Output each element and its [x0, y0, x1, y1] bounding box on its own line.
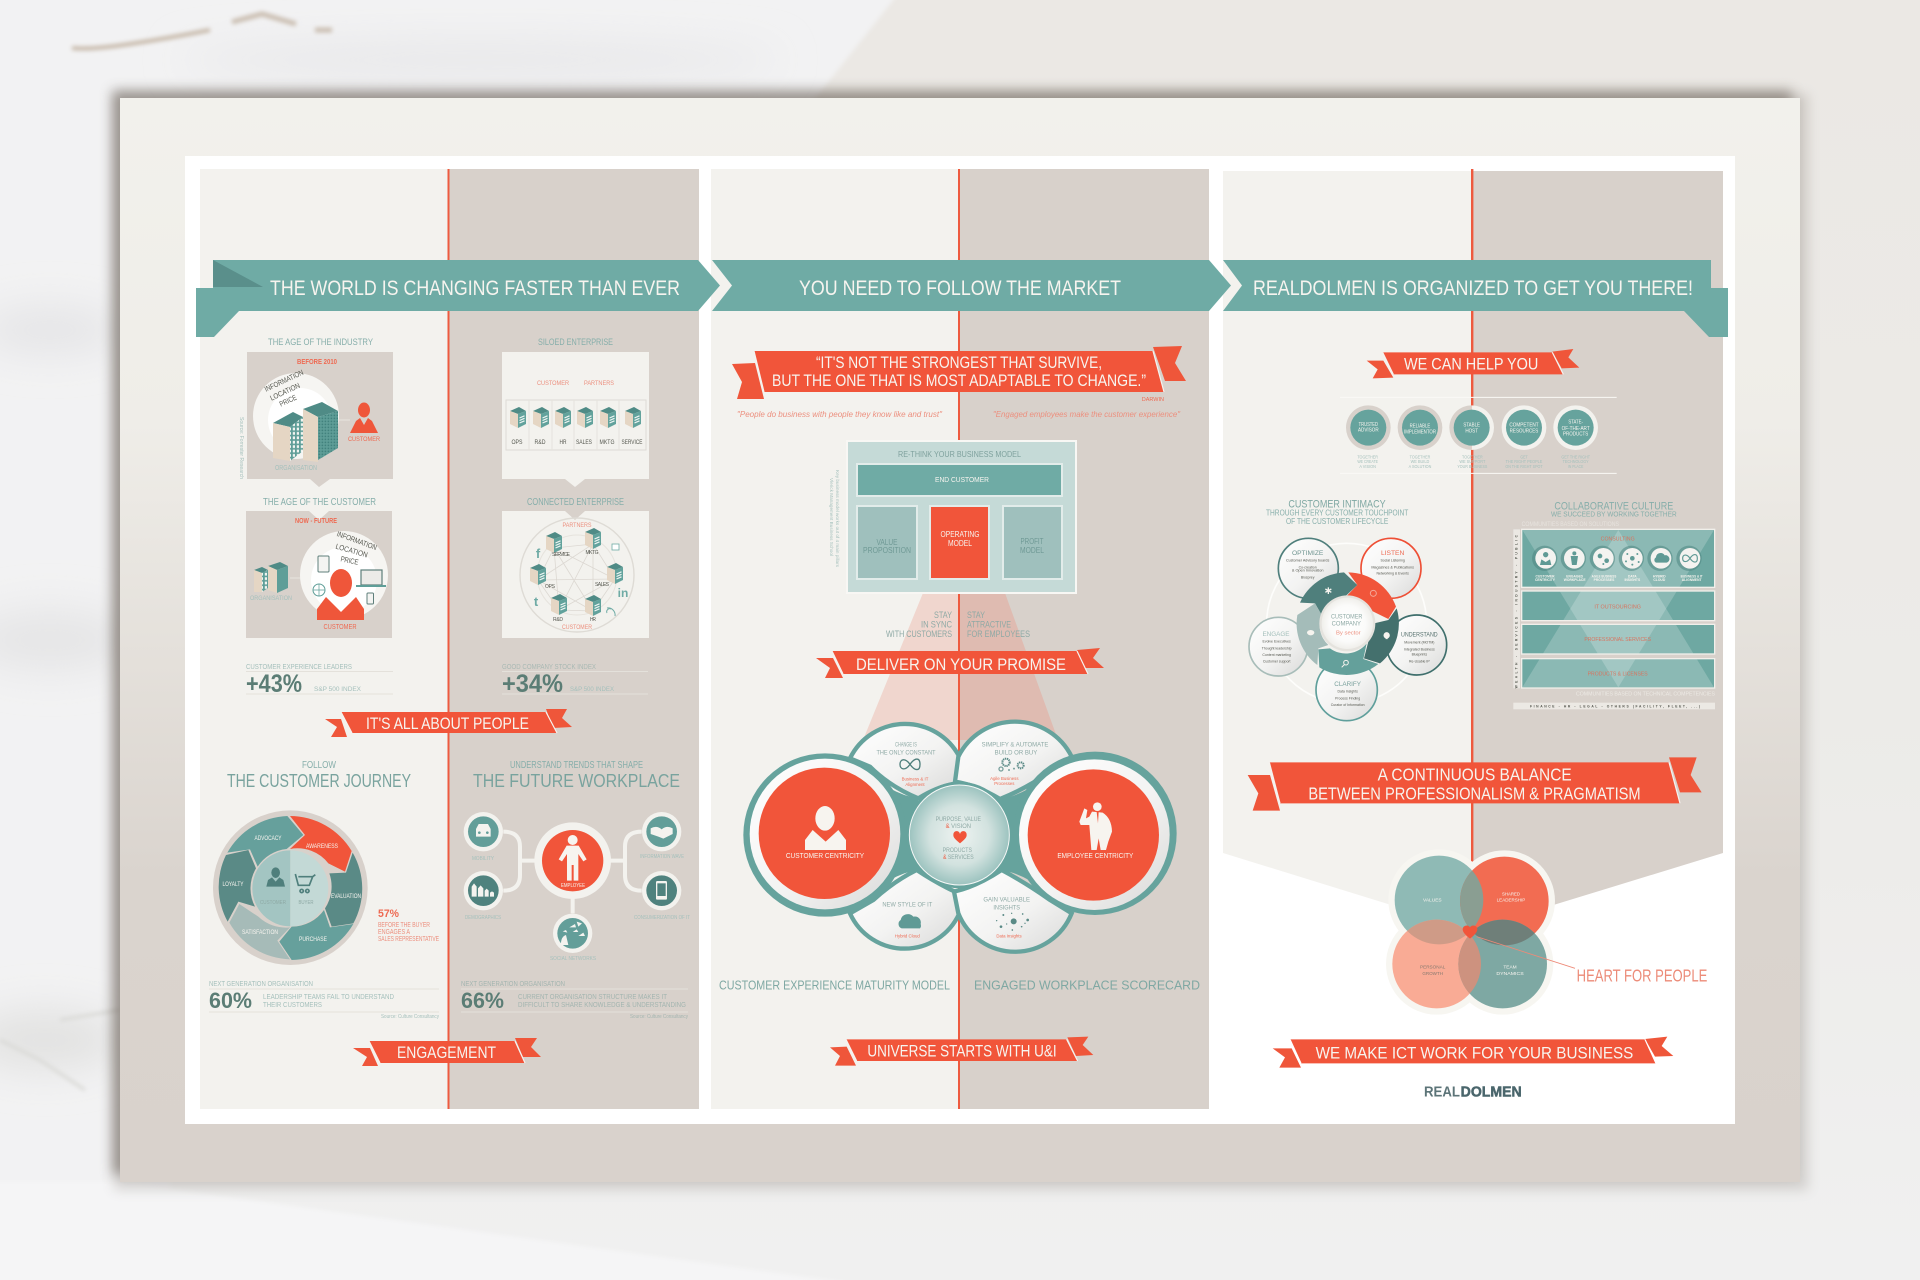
- label: age of the customer: THE AGE OF THE CUSTOMER: [263, 497, 376, 508]
- label: siloed enterprise: SILOED ENTERPRISE: [538, 337, 613, 348]
- lobe: change is the only constant: Business & IT: [902, 777, 929, 782]
- stat: 60%: 60%: [209, 988, 252, 1013]
- heading: customer intimacy: [1266, 499, 1408, 526]
- competence icons: INSIGHTS: [1624, 578, 1641, 582]
- ribbon: continuous balance: A CONTINUOUS BALANCE: [1378, 765, 1572, 785]
- venn diagram: heart for people: TEAM: [1503, 965, 1517, 971]
- venn diagram: heart for people: GROWTH: [1422, 971, 1443, 977]
- competence icons: ALIGNMENT: [1682, 578, 1702, 582]
- diagram: future workplace hub: [464, 812, 691, 962]
- text: stay attractive: [967, 610, 1030, 639]
- ribbon: continuous balance: BETWEEN PROFESSIONALISM & PRAGMATISM: [1308, 783, 1641, 803]
- stat: +43%: S&P 500 INDEX: [314, 686, 362, 693]
- diagram: collaborative culture matrix: FINANCE - HR - LEGAL - OTHERS (FACILITY, FLEET, ...): [1530, 705, 1700, 709]
- lower panel contents: [1248, 757, 1707, 1101]
- service badges: IMPLEMENTOR: [1404, 429, 1436, 435]
- diagram: collaborative culture matrix: COMMUNITIES BASED ON TECHNICAL COMPETENCIES: [1576, 692, 1715, 698]
- stat: 60%: LEADERSHIP TEAMS FAIL TO UNDERSTAND: [263, 992, 394, 1001]
- circle: optimize: & Open Innovation: [1292, 569, 1324, 573]
- heading: customer journey: FOLLOW: [302, 760, 336, 771]
- hub centre: By sector: [1336, 630, 1361, 636]
- heading: customer intimacy: OF THE CUSTOMER LIFECYCLE: [1286, 517, 1388, 526]
- card: connected network: in: [618, 586, 628, 600]
- business model: END CUSTOMER: [935, 475, 990, 484]
- light cone: [863, 593, 1058, 740]
- card: before 2010: ORGANISATION: [275, 465, 317, 472]
- text: stay attractive: FOR EMPLOYEES: [967, 629, 1030, 639]
- panel: the world is changing: [200, 169, 699, 1109]
- service badges: A VISION: [1359, 464, 1376, 469]
- logo: realdolmen: [1424, 1085, 1522, 1101]
- circle: employee centricity: EMPLOYEE CENTRICITY: [1057, 853, 1134, 860]
- lobe: gain valuable insights: GAIN VALUABLE: [983, 898, 1030, 904]
- hub centre: COMPANY: [1332, 621, 1361, 628]
- circle: engage: ENGAGE: [1262, 631, 1290, 638]
- stat: 66%: CURRENT ORGANISATION STRUCTURE MAKES IT: [518, 992, 667, 1001]
- venn diagram: heart for people: [1386, 849, 1707, 1015]
- attribution: DARWIN: [1142, 397, 1164, 403]
- service badges: THE RIGHT PEOPLE: [1506, 459, 1542, 464]
- source note: [829, 470, 840, 568]
- ribbon: engagement: [353, 1038, 541, 1066]
- panel: realdolmen is organized: [1223, 169, 1723, 1101]
- heading: collaborative culture: WE SUCCEED BY WORKING TOGETHER: [1551, 510, 1677, 519]
- competence icons: PROCESSES: [1594, 578, 1615, 582]
- circle: clarify: CLARIFY: [1334, 681, 1362, 688]
- stat: 66%: DIFFICULT TO SHARE KNOWLEDGE & UNDERSTANDING: [518, 1000, 686, 1009]
- heading: future workplace: [473, 760, 680, 791]
- ribbon: darwin quote: “IT'S NOT THE STRONGEST THAT SURVIVE,: [816, 354, 1102, 372]
- card: siloed departments: SALES: [576, 440, 592, 446]
- card: connected network: SERVICE: [552, 552, 571, 558]
- competence icons: HYBRID: [1653, 574, 1666, 578]
- service badges: RELIABLE: [1410, 423, 1430, 429]
- business model: PROFIT: [1020, 537, 1044, 546]
- ribbon: we make ict work: [1273, 1037, 1673, 1068]
- heading: future workplace: THE FUTURE WORKPLACE: [473, 771, 680, 791]
- stat: 66%: NEXT GENERATION ORGANISATION: [461, 979, 565, 988]
- circle: optimize: Co-creation: [1299, 565, 1317, 569]
- lobe: change is the only constant: [850, 724, 959, 798]
- quote: customers: "People do business with people they know like and trust": [737, 409, 943, 419]
- text: stay in sync: WITH CUSTOMERS: [886, 629, 952, 639]
- centre: purpose value vision: PRODUCTS: [943, 848, 972, 854]
- circle: customer centricity: CUSTOMER CENTRICITY: [786, 853, 864, 860]
- lobe: simplify and automate: Processes: [994, 781, 1014, 786]
- card: connected network: CUSTOMER: [562, 624, 592, 631]
- service badges: GET: [1520, 454, 1528, 459]
- stat: 60%: THEIR CUSTOMERS: [263, 1000, 322, 1009]
- service badges: OF-THE-ART: [1562, 426, 1590, 432]
- card: connected network: R&D: [553, 617, 563, 623]
- diagram: future workplace hub: MOBILITY: [472, 856, 494, 862]
- venn diagram: heart for people: SHARED: [1502, 891, 1520, 897]
- business model: [847, 441, 1076, 593]
- lobe: gain valuable insights: [954, 870, 1072, 952]
- hub segments: [1297, 572, 1399, 675]
- ribbon: universe starts with u&i: UNIVERSE STARTS WITH U&I: [867, 1043, 1057, 1061]
- card: now future: ORGANISATION: [250, 595, 292, 602]
- text: stay in sync: [886, 610, 952, 639]
- ribbon: it's all about people: [325, 709, 572, 737]
- service badges: [1346, 405, 1598, 469]
- competence icons: CUSTOMER: [1536, 574, 1555, 578]
- callout: 57%: SALES REPRESENTATIVE: [378, 936, 439, 943]
- card: siloed departments: CUSTOMER: [537, 380, 569, 387]
- circle: engage: Evolve Executives: [1263, 640, 1291, 644]
- label: customer experience maturity model: CUSTOMER EXPERIENCE MATURITY MODEL: [719, 978, 950, 992]
- diagram: future workplace hub: CONSUMERIZATION OF IT: [634, 915, 691, 921]
- lobe: change is the only constant: THE ONLY CONSTANT: [876, 750, 936, 756]
- heading: customer journey: [227, 760, 411, 791]
- heading: collaborative culture: COLLABORATIVE CULTURE: [1554, 500, 1673, 512]
- diagram: future workplace hub: DEMOGRAPHICS: [465, 915, 501, 921]
- circle: optimize: Customer Advisory boards: [1286, 559, 1330, 563]
- card: connected network: f: [536, 546, 541, 561]
- banner: the world is changing faster than ever: [196, 260, 720, 337]
- chart: customer journey wheel: LOYALTY: [222, 881, 244, 888]
- business model: MODEL: [1020, 546, 1044, 555]
- card: now future: [246, 511, 392, 638]
- venn diagram: heart for people: VALUES: [1423, 898, 1442, 904]
- heading: customer journey: THE CUSTOMER JOURNEY: [227, 771, 411, 791]
- service badges: TECHNOLOGY: [1563, 459, 1589, 464]
- circle: listen: [1361, 538, 1421, 598]
- card: siloed departments: [502, 352, 649, 487]
- logo: realdolmen: REAL: [1424, 1085, 1460, 1101]
- card: siloed departments: HR: [560, 440, 567, 446]
- lobe: new style of it: [850, 870, 959, 949]
- card: before 2010: [247, 352, 393, 487]
- diagram: future workplace hub: EMPLOYEE: [561, 883, 585, 889]
- card: connected network: OPS: [545, 584, 556, 590]
- ribbon: we can help you: [1367, 349, 1579, 378]
- source note: Vlerick Management Business School: [829, 478, 834, 556]
- stat: +34%: GOOD COMPANY STOCK INDEX: [502, 664, 596, 671]
- business model: VALUE: [876, 538, 898, 547]
- circle: engage: Customer support: [1263, 660, 1291, 664]
- circle: understand: Movement (MOTM): [1404, 640, 1434, 644]
- white inner frame: [185, 156, 1735, 1124]
- service badges: WE SUPPORT: [1459, 459, 1486, 464]
- stat: +34%: +34%: [502, 670, 563, 698]
- service badges: STABLE: [1463, 423, 1480, 429]
- poster sheet: [120, 98, 1800, 1182]
- chart: customer journey wheel: ADVOCACY: [254, 835, 282, 842]
- circle: optimize: OPTIMIZE: [1292, 550, 1324, 557]
- label: engaged workplace scorecard: ENGAGED WORKPLACE SCORECARD: [974, 978, 1200, 992]
- diagram: collaborative culture matrix: COMMUNITIES BASED ON SOLUTIONS: [1522, 522, 1619, 528]
- lobe: change is the only constant: Alignment: [905, 782, 925, 787]
- stat: +34%: [502, 664, 648, 698]
- card: siloed departments: MKTG: [600, 440, 615, 446]
- stat: 60%: NEXT GENERATION ORGANISATION: [209, 979, 313, 988]
- banner: realdolmen is organized to get you there: REALDOLMEN IS ORGANIZED TO GET YOU THERE!: [1253, 277, 1693, 300]
- service badges: TOGETHER: [1410, 454, 1430, 459]
- business model: PROPOSITION: [863, 546, 911, 555]
- circle: clarify: Process Finding: [1335, 696, 1360, 700]
- service badges: ON THE RIGHT SPOT: [1505, 464, 1543, 469]
- stat: 66%: 66%: [461, 988, 504, 1013]
- diagram: customer lifecycle wheel: [1249, 538, 1447, 721]
- card: before 2010: INFORMATION: [263, 368, 305, 394]
- heading: future workplace: UNDERSTAND TRENDS THAT SHAPE: [510, 760, 643, 771]
- venn diagram: heart for people: DYNAMICS: [1496, 971, 1524, 977]
- banner: the world is changing faster than ever: THE WORLD IS CHANGING FASTER THAN EVER: [270, 277, 680, 300]
- diagram: collaborative culture matrix: PRODUCTS & LICENSES: [1588, 671, 1648, 677]
- card: now future: CUSTOMER: [324, 624, 356, 631]
- ribbon: we make ict work: WE MAKE ICT WORK FOR YOUR BUSINESS: [1316, 1043, 1633, 1062]
- poster shadow: [112, 90, 1808, 1190]
- ribbon: engagement: ENGAGEMENT: [397, 1043, 496, 1062]
- stat: +43%: +43%: [246, 670, 302, 698]
- card: connected network: MKTG: [586, 550, 599, 556]
- lobe: gain valuable insights: Data Insights: [996, 933, 1022, 938]
- text: stay attractive: STAY: [967, 610, 985, 620]
- circle: clarify: Data Insights: [1337, 690, 1358, 694]
- card: now future: LOCATION: [335, 542, 369, 559]
- card: connected network: HR: [590, 617, 596, 623]
- ribbon: darwin quote: BUT THE ONE THAT IS MOST ADAPTABLE TO CHANGE.”: [772, 372, 1146, 390]
- text: stay in sync: IN SYNC: [921, 620, 952, 630]
- text: stay in sync: STAY: [934, 610, 952, 620]
- ribbon: it's all about people: IT'S ALL ABOUT PEOPLE: [366, 715, 529, 733]
- lobe: new style of it: NEW STYLE OF IT: [882, 903, 933, 909]
- text: stay attractive: ATTRACTIVE: [967, 620, 1011, 630]
- circle: employee centricity: [1013, 752, 1177, 915]
- competence icons: CENTRICITY: [1535, 578, 1556, 582]
- diagram: future workplace hub: SOCIAL NETWORKS: [550, 956, 596, 962]
- service badges: IN PLACE: [1568, 464, 1583, 469]
- ribbon: universe starts with u&i: [830, 1037, 1093, 1066]
- card: now future: NOW - FUTURE: [295, 516, 337, 525]
- diagram: collaborative culture matrix: [1513, 522, 1715, 709]
- circle: clarify: Curator of Information: [1331, 703, 1365, 707]
- service badges: TOGETHER: [1462, 454, 1483, 459]
- chart: customer journey wheel: [213, 810, 368, 965]
- card: now future: PRICE: [340, 554, 359, 567]
- service badges: WE BUILD: [1411, 459, 1429, 464]
- lobe: simplify and automate: SIMPLIFY & AUTOMATE: [982, 743, 1048, 749]
- card: connected network: t: [534, 594, 539, 609]
- stat: +43%: CUSTOMER EXPERIENCE LEADERS: [246, 664, 352, 671]
- service badges: TRUSTED: [1359, 422, 1378, 428]
- callout: 57%: ENGAGES A: [378, 929, 410, 936]
- lobe: simplify and automate: Agile Business: [990, 776, 1019, 781]
- upper panel contents: [1249, 349, 1715, 721]
- circle: understand: Re-Usable IP: [1409, 660, 1430, 664]
- logo: realdolmen: DOLMEN: [1461, 1085, 1522, 1101]
- circle: engage: Content marketing: [1262, 653, 1291, 657]
- competence icons: [1532, 546, 1703, 582]
- card: siloed departments: PARTNERS: [584, 380, 615, 387]
- lobe: change is the only constant: CHANGE IS: [895, 743, 917, 749]
- circle: listen: Networking & Events: [1376, 572, 1409, 576]
- circle: listen: Social Listening: [1380, 559, 1405, 563]
- heading: customer intimacy: THROUGH EVERY CUSTOMER TOUCHPOINT: [1266, 509, 1408, 518]
- circle: listen: Magazines & Publications: [1371, 565, 1414, 569]
- service badges: RESOURCES: [1510, 429, 1539, 435]
- service badges: A SOLUTION: [1409, 464, 1431, 469]
- venn diagram: heart for people: HEART FOR PEOPLE: [1577, 966, 1707, 986]
- diagram: collaborative culture matrix: CONSULTING: [1601, 537, 1635, 543]
- card: before 2010: CUSTOMER: [348, 436, 380, 443]
- chart: customer journey wheel: SATISFACTION: [242, 929, 278, 936]
- service badges: PRODUCTS: [1563, 432, 1589, 438]
- ribbon: continuous balance: [1248, 757, 1702, 811]
- circle: understand: Blueprints: [1412, 652, 1427, 656]
- card: before 2010: LOCATION: [269, 381, 301, 403]
- hub centre: CUSTOMER: [1331, 613, 1362, 620]
- service badges: STATE-: [1568, 419, 1583, 425]
- label: connected enterprise: CONNECTED ENTERPRISE: [527, 497, 624, 508]
- callout: 57%: [378, 908, 439, 943]
- service badges: GET THE RIGHT: [1561, 454, 1590, 459]
- centre: purpose value vision: & VISION: [946, 824, 971, 830]
- card: connected network: PARTNERS: [562, 522, 592, 529]
- source note: Key business model works out of 4 main pillars: [835, 470, 840, 568]
- competence icons: AGILE BUSINESS: [1592, 574, 1617, 578]
- chart: customer journey wheel: BUYER: [298, 900, 314, 906]
- diagram: customer and employee centricity: [719, 722, 1200, 1066]
- stat: 60%: Source: Culture Consultancy: [381, 1014, 439, 1020]
- centre: purpose value vision: PURPOSE, VALUE: [936, 817, 981, 823]
- business model: MODEL: [948, 539, 972, 548]
- stat: 60%: [209, 979, 439, 1020]
- banner: realdolmen is organized to get you there: [1223, 260, 1728, 337]
- competence icons: DATA: [1628, 574, 1637, 578]
- callout: 57%: BEFORE THE BUYER: [378, 922, 430, 929]
- chart: customer journey wheel: AWARENESS: [306, 843, 339, 850]
- card: before 2010: PRICE: [278, 393, 298, 409]
- service badges: TOGETHER: [1357, 454, 1378, 459]
- card: connected network: SALES: [595, 582, 610, 588]
- service badges: YOUR BUSINESS: [1457, 464, 1487, 469]
- diagram: collaborative culture matrix: WEALTH - SERVICES - INDUSTRY - PUBLIC: [1515, 534, 1519, 688]
- circle: understand: [1387, 615, 1447, 675]
- circle: engage: [1249, 617, 1308, 676]
- card: connected network: [502, 511, 649, 638]
- competence icons: WORKPLACE: [1564, 578, 1586, 582]
- lobe: gain valuable insights: INSIGHTS: [993, 905, 1020, 911]
- venn diagram: heart for people: LEADERSHIP: [1497, 897, 1526, 903]
- quote: employees: "Engaged employees make the customer experience": [993, 409, 1181, 419]
- heading: collaborative culture: [1551, 500, 1677, 519]
- diagram: collaborative culture matrix: IT OUTSOURCING: [1594, 604, 1641, 610]
- circle: optimize: Biosprey: [1301, 575, 1315, 579]
- service badges: HOST: [1465, 429, 1478, 435]
- card: siloed departments: SERVICE: [622, 440, 642, 446]
- chart: customer journey wheel: EVALUATION: [331, 893, 361, 900]
- chart: customer journey wheel: PURCHASE: [299, 936, 328, 943]
- lobe: simplify and automate: [955, 722, 1072, 799]
- card: before 2010: BEFORE 2010: [297, 357, 337, 366]
- centre: purpose value vision: & SERVICES: [943, 855, 974, 861]
- competence icons: ENGAGED: [1566, 574, 1584, 578]
- circle: customer centricity: [743, 753, 907, 917]
- stat: 66%: Source: Culture Consultancy: [630, 1014, 688, 1020]
- business model: OPERATING: [940, 530, 980, 539]
- banner: you need to follow the market: YOU NEED TO FOLLOW THE MARKET: [799, 277, 1121, 300]
- circle: listen: LISTEN: [1381, 550, 1405, 557]
- heading: customer intimacy: CUSTOMER INTIMACY: [1288, 499, 1386, 511]
- circle: clarify: [1316, 659, 1377, 721]
- service badges: ADVISOR: [1358, 428, 1379, 434]
- stat: +34%: S&P 500 INDEX: [570, 686, 615, 693]
- card: siloed departments: R&D: [534, 440, 546, 446]
- chart: customer journey wheel: CUSTOMER: [260, 900, 286, 906]
- circle: understand: Integrated Business: [1404, 648, 1435, 652]
- ribbon: darwin quote: [732, 346, 1186, 399]
- ribbon: deliver on your promise: DELIVER ON YOUR PROMISE: [856, 655, 1066, 674]
- circle: understand: UNDERSTAND: [1401, 632, 1438, 639]
- hub centre: [1319, 595, 1375, 651]
- card: now future: INFORMATION: [336, 529, 378, 552]
- diagram: future workplace hub: INFORMATION WAVE: [640, 854, 684, 860]
- lobe: simplify and automate: BUILD OR BUY: [995, 750, 1037, 756]
- stat: +43%: [246, 664, 393, 698]
- diagram: collaborative culture matrix: PROFESSIONAL SERVICES: [1584, 637, 1651, 643]
- circle: engage: Thought leadership: [1262, 646, 1292, 650]
- centre: purpose value vision: [906, 782, 1013, 888]
- business model: RE-THINK YOUR BUSINESS MODEL: [898, 450, 1021, 459]
- stat: 66%: [461, 979, 688, 1020]
- lobe: new style of it: Hybrid Cloud: [895, 933, 920, 938]
- source note: Source: Forrester Research: [238, 417, 244, 479]
- ribbon: we can help you: WE CAN HELP YOU: [1404, 354, 1538, 373]
- service badges: WE CREATE: [1357, 459, 1378, 464]
- ribbon: deliver on your promise: [816, 648, 1104, 678]
- label: age of the industry: THE AGE OF THE INDUSTRY: [268, 337, 374, 348]
- competence icons: BUSINESS & IT: [1681, 574, 1703, 578]
- circle: optimize: [1278, 538, 1338, 598]
- venn diagram: heart for people: PERSONAL: [1420, 965, 1446, 971]
- competence icons: CLOUD: [1653, 578, 1666, 582]
- callout: 57%: 57%: [378, 908, 399, 920]
- banner: you need to follow the market: [712, 260, 1231, 311]
- service badges: COMPETENT: [1509, 423, 1539, 429]
- card: siloed departments: OPS: [512, 440, 522, 446]
- panel: follow the market: [711, 169, 1209, 1109]
